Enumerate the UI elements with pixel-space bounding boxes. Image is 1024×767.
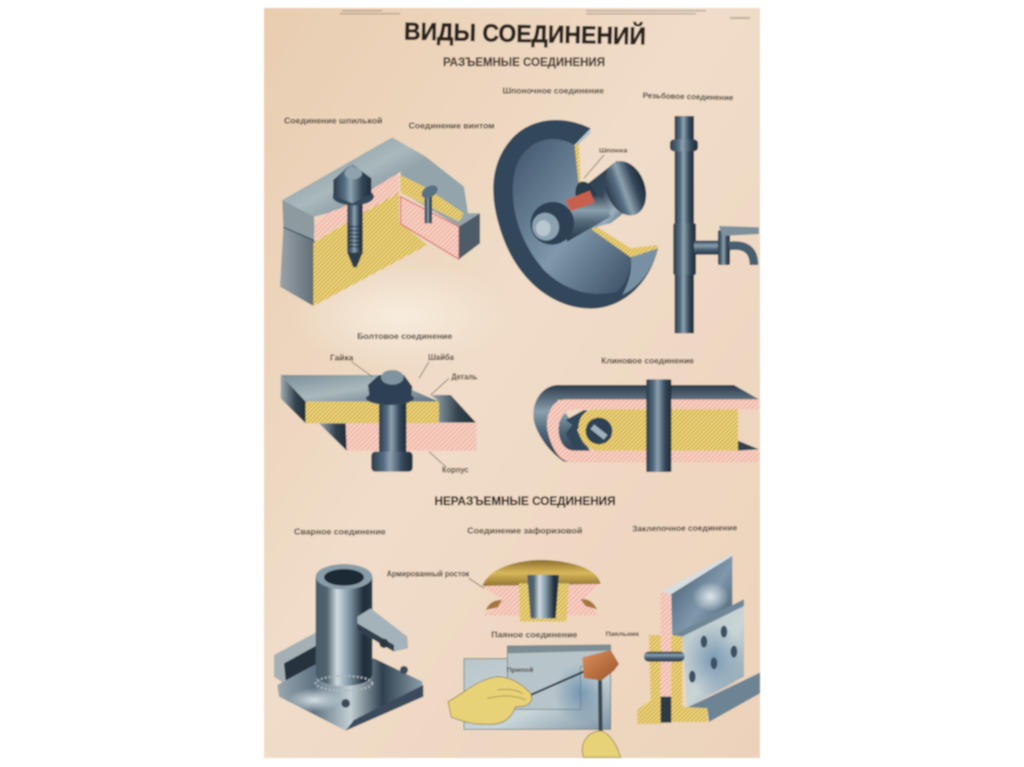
bolt head [371,452,413,472]
label: nut: Гайка [330,354,354,363]
strap outer dark [533,385,759,462]
stud thread [347,227,363,247]
subtitle: detachable joints: РАЗЪЕМНЫЕ СОЕДИНЕНИЯ [443,57,605,69]
hub end [598,155,653,221]
base glint [287,688,341,712]
panel: threaded joint [643,91,759,333]
block seam [283,227,315,241]
collar [571,178,604,222]
tap body [718,230,730,265]
angle blue tint [684,623,744,697]
panel: welded joint [274,528,469,731]
strap section [547,399,759,462]
shaft [559,193,611,242]
label: stud joint: Соединение шпилькой [284,116,382,125]
block right top face [401,157,480,227]
cylinder top [316,564,372,589]
strap end notch [738,441,759,451]
pulley disc [493,120,658,309]
pink body [482,584,601,616]
yellow section [306,402,439,423]
label: key joint: Шпоночное соединение [503,86,605,95]
lower plate top [431,395,476,423]
paper light blotch [290,260,510,370]
nut top [381,370,404,385]
side arm [357,608,408,652]
label: part: Деталь [451,372,477,381]
lower sheet [464,659,611,729]
plate section [661,592,671,697]
arm hole [379,639,389,648]
plate glint [692,582,729,612]
poster [264,8,760,758]
pin hole [586,418,612,444]
angle top edge [672,599,744,637]
left section [637,635,661,724]
tee coupling [673,223,696,275]
gold cap [482,560,601,586]
bolt shank [379,402,406,453]
pulley inner face [513,139,631,294]
cylinder bore [324,569,364,586]
pin hole highlight [592,427,606,437]
panel: key joint [493,86,658,309]
block left side [280,227,315,306]
yellow section [313,192,427,306]
rib shadow [284,645,317,681]
stud shank [347,197,363,253]
top rim section [575,144,581,187]
tap spout [729,246,754,265]
key [566,191,595,211]
top shadow [507,645,611,653]
hand [448,677,532,724]
angle face [672,599,744,707]
vertical plate [671,555,732,640]
top rim end [575,128,591,145]
bottom flange [687,673,760,722]
arm shadow [357,623,394,652]
insert section [519,583,569,622]
top coupling [670,139,698,151]
stud nut top [345,167,362,179]
label: screw joint: Соединение винтом [409,121,495,130]
hub cylinder [584,161,641,230]
solder wire [594,678,607,733]
label: housing: Корпус [442,465,469,474]
finger lines [487,689,526,700]
label: washer: Шайба [428,353,455,362]
nut centre [536,220,551,236]
paper background [264,8,760,758]
label: key: Шпонка [599,149,628,155]
weld seam [316,676,372,691]
block top face [282,137,426,217]
copper tip [582,650,619,681]
leader [469,578,484,588]
label: welded joint: Сварное соединение [294,528,386,537]
iron rod [531,669,589,695]
label: bolted joint: Болтовое соединение [357,332,453,341]
pink upper section [314,173,399,241]
label: reinforced boss: Армированный росток [387,570,469,579]
sheet blue tint [554,663,607,723]
right end face [459,213,480,259]
small print strips [340,10,750,19]
lower dark wedge [319,423,347,451]
bore [527,575,559,618]
rivet [644,652,685,662]
nut [523,195,581,252]
leader: key [584,155,604,178]
left rib [274,632,317,683]
panel: wedge joint [533,356,759,472]
small screw head [419,183,440,201]
rivet heads [689,626,737,683]
left recess [486,600,502,610]
right recess [581,599,597,609]
small screw shank [425,197,432,223]
gap [661,697,671,723]
tap handle [719,226,759,236]
pipe [675,116,694,333]
panel: riveted joint [632,523,760,724]
stud tip [347,253,363,267]
yellow section [578,409,738,451]
nut [368,375,412,405]
bottom rim section [592,224,658,257]
top plate side [281,375,306,423]
right yellow section [401,175,464,222]
washer [366,392,414,405]
stud washer [333,188,374,205]
label: solder: Припой [507,667,534,674]
base plate [277,658,423,731]
base shadow [346,685,423,731]
panel: stud and screw joint [280,116,495,306]
panel: bolted joint [281,332,477,474]
title: ВИДЫ СОЕДИНЕНИЙ [404,17,646,51]
top plate face [281,375,439,402]
label: riveted joint: Заклепочное соединение [632,523,738,533]
subtitle: permanent joints: НЕРАЗЪЕМНЫЕ СОЕДИНЕНИЯ [434,494,616,508]
label: threaded joint: Резьбовое соединение [643,91,734,102]
right section [671,635,707,722]
panel: soldered joint [448,630,639,757]
cylinder [316,577,372,686]
pin recess [566,410,592,451]
plate top edge [661,553,732,594]
nut face [528,208,564,245]
pink section [346,423,476,451]
side branch [694,241,721,255]
label: soldered joint: Паяное соединение [491,630,578,639]
lower hand [582,731,621,757]
wedge [646,379,671,472]
leaders [351,362,449,467]
label: bushing joint: Соединение зафоризовой [467,526,582,535]
label: wedge joint: Клиновое соединение [601,356,695,365]
block upper left lip [282,200,315,241]
stud nut [333,163,371,203]
panel: bushing joint [467,526,601,622]
label: soldering iron: Паяльник [606,632,639,638]
base bolts [341,666,408,708]
upper sheet [507,645,611,709]
lower rim inner [622,248,658,295]
right pink section [401,197,459,259]
